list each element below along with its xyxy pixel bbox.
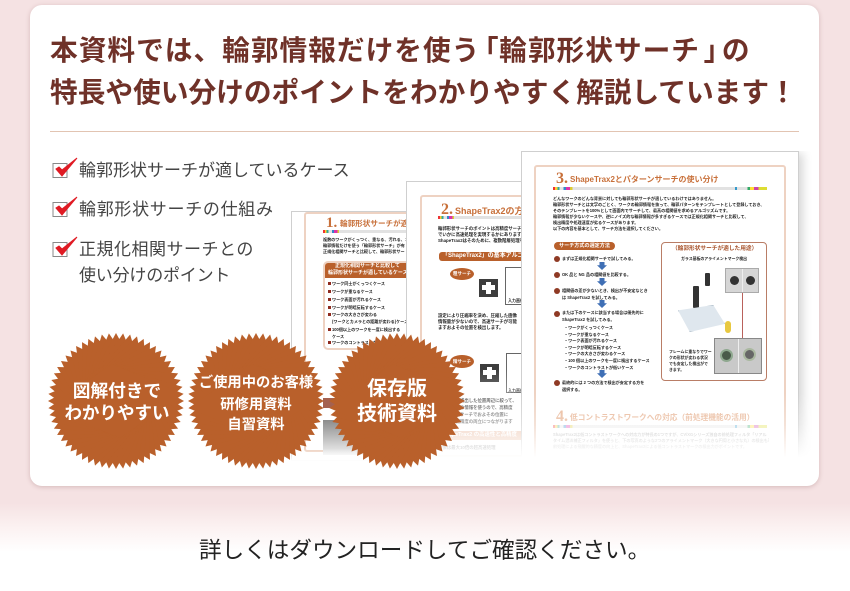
camera icon large	[693, 286, 699, 308]
page 1 case box: ワークが重なるケース	[332, 289, 373, 294]
search method steps: まずは正規化相関サーチで試してみる。	[562, 256, 636, 261]
checklist	[52, 158, 350, 285]
page 1 case box: (ワークとカメラとの距離が変わる)ケース	[332, 319, 407, 324]
section 4 heading: 4.	[556, 408, 568, 425]
cross template	[479, 279, 498, 297]
search method steps: ・ワークが明暗反転するケース	[564, 345, 621, 350]
page 1 content: 輪郭情報だけを使う「輪郭形状サーチ」が有	[323, 243, 405, 248]
badge text: training material	[199, 374, 313, 433]
page 3 heading	[556, 170, 719, 187]
badge text: easy to understand: 図解付きで	[73, 381, 161, 401]
yellow cable	[725, 321, 731, 333]
search method steps: 相関値の差が少ないとき、検出が不安定なとき	[562, 288, 648, 293]
page 2 heading: 2.	[441, 201, 453, 218]
page 1 case box: ケース	[332, 334, 344, 339]
page 2 fade	[406, 369, 522, 459]
box caption	[669, 349, 712, 372]
input image box 2	[506, 353, 556, 393]
footer message: 詳しくはダウンロードしてご確認ください。	[199, 538, 650, 563]
box caption: クの形状が変わる状況	[669, 355, 708, 360]
page 2 content	[438, 201, 522, 450]
page 1 lower figure	[323, 398, 407, 408]
badge text: training material: 研修用資料	[220, 397, 292, 413]
search method pill: サーチ方式の選定方法	[559, 243, 610, 249]
page 1 case box: 100個以上のワークを一度に検出する	[332, 327, 400, 332]
check item 3	[52, 236, 254, 285]
search method steps: ShapeTrax2 を試してみる。	[562, 317, 615, 322]
section 4 text	[553, 432, 769, 449]
mark photo upper	[725, 268, 759, 293]
page 2 lower heading	[439, 431, 559, 440]
title: 本資料では、輪郭情報だけを使う「輪郭形状サーチ」の	[50, 35, 751, 66]
search method steps: は ShapeTrax2 を試してみる。	[562, 295, 620, 300]
panel: document page 2	[406, 181, 522, 459]
page 2 content: 画像は最大10倍の超高速処理	[438, 445, 496, 450]
badge text: easy to understand	[64, 381, 170, 423]
application box	[661, 242, 767, 381]
page 2 content: 少ない階層の情報を使うので、高精度	[438, 405, 512, 410]
page 1 case box: ワーク表面が汚れるケース	[332, 297, 381, 302]
coarse search label: 粗サーチ	[453, 271, 471, 276]
mark photo lower	[714, 338, 762, 374]
badge text: archive technical material	[357, 378, 437, 425]
page 3 heading: ShapeTrax2とパターンサーチの使い分け	[570, 175, 719, 184]
connector arrow	[742, 293, 743, 338]
fine search label	[450, 355, 474, 368]
application box: ガラス基板のアライメントマーク検出	[681, 256, 747, 261]
badge text: training material: ご使用中のお客様	[199, 375, 313, 391]
check item 2: 輪郭形状サーチの仕組み	[79, 200, 274, 219]
search method steps: または下のケースに該当する場合は優先的に	[562, 310, 644, 315]
page 3 intro text: 検出精度や処理速度が劣るケースがあります。	[553, 220, 638, 225]
page 2 content: ShapeTrax2の方	[455, 206, 522, 216]
panel: document page 3	[521, 151, 819, 463]
search method steps: ・ワークが重なるケース	[564, 332, 609, 337]
page 2 algorithm heading	[439, 252, 559, 261]
divider	[50, 131, 799, 132]
search method steps: ・ワーク表面が汚れるケース	[564, 338, 617, 343]
page 3 intro text: どんなワークのどんな背景に対しても輪郭形状サーチが適しているわけではありません。	[553, 196, 716, 201]
page 1 case box: ワークの大きさが変わる	[332, 312, 377, 317]
page 2 content: 設定により圧縮率を決め、圧縮した画像	[438, 313, 517, 318]
search method steps: ・ワークの大きさが変わるケース	[564, 351, 625, 356]
title: 特長や使い分けのポイントをわかりやすく解説しています！	[50, 77, 797, 108]
box caption: フレームに重なりでワー	[669, 349, 712, 354]
badge text: archive technical material: 保存版	[367, 378, 427, 400]
page 1 case box: ワークのコントラストが低い	[332, 340, 385, 345]
page 3 intro text: 輪郭情報が少ないケースや、逆にノイズ的な輪郭情報が多すぎるケースでは正規化相関サーチと比較して、	[553, 214, 749, 219]
page 3 intro text: 輪郭形状サーチとは文字のごとく、ワークの輪郭情報を抜って、輪郭パターンをテンプレートとして登録しておき、	[553, 202, 764, 207]
page 1 content	[323, 215, 407, 350]
page 2 content: 情報量が少ないので、高速サーチが可能	[438, 319, 517, 324]
search method steps: 最終的には 2 つの方法で検出が安定する方を	[562, 380, 644, 385]
page 1 case box	[323, 261, 443, 350]
page 1 fade	[291, 449, 407, 461]
check item 3: 使い分けのポイント	[79, 266, 230, 285]
check item 3: 正規化相関サーチとの	[79, 240, 254, 259]
page 2 content: 粗サーチで検出した位置周辺に絞って、	[438, 398, 517, 403]
panel: main card	[30, 5, 819, 486]
application box: （輪郭形状サーチが適した用途）	[672, 246, 757, 252]
check item 1: 輪郭形状サーチが適しているケース	[79, 161, 350, 180]
page 1 case box: 正規化相関サーチと比較して	[335, 263, 400, 269]
search method pill	[554, 242, 615, 250]
page 1 heading: 輪郭形状サーチが適	[340, 219, 407, 228]
page 1 content: 1.	[326, 215, 337, 231]
page 3 intro text: そのテンプレートを100%として画面内でサーチして、最高の相関値を求めるアルゴリズムです。	[553, 208, 730, 213]
page 3 intro text	[553, 196, 764, 231]
search method steps: ・ワークがくっつくケース	[564, 325, 613, 330]
page 1 case box: ワーク同士がくっつくケース	[332, 281, 385, 286]
badge text: training material: 自習資料	[227, 417, 285, 433]
search method steps: 選択する。	[562, 387, 582, 392]
page 3 intro text: 以下の内容を基本として、サーチ方法を選択してください。	[553, 226, 663, 231]
page 1 case box: ワークが明暗反転するケース	[332, 305, 385, 310]
cross template 2	[480, 364, 499, 382]
page 3 fade	[521, 393, 819, 463]
input image box	[505, 267, 555, 305]
search method steps	[554, 256, 650, 392]
search method steps: OK 品と NG 品の相関値を比較する。	[562, 272, 631, 277]
page 1 case box: 輪郭形状サーチが適しているケース	[328, 270, 407, 276]
page 2 lower heading: ShapeTrax2 の高速性と高精度	[442, 432, 517, 438]
coarse search label	[450, 268, 474, 280]
page 1 content: 正規化相関サーチと比較して、輪郭形状サー	[323, 249, 405, 254]
badge text: archive technical material: 技術資料	[357, 403, 437, 425]
box caption: きます。	[669, 367, 684, 372]
section 4 text: 前処理による飛躍的な精度の向上と、ShapeTrax2による低コントラストマークの検出力がポイントです。	[553, 444, 747, 449]
page 2 content: さらに、粗サーチでおよその位置に	[438, 412, 508, 417]
section 4 text: ShapeTrax2は低コントラストワークへの対応力が特長の1つですが、CV/XGシリーズ独自の前処理フィルタ「リアル	[553, 432, 767, 437]
camera icon small	[705, 273, 710, 286]
page 1 content: 複数のワークがくっつく、重なる、汚れる、コ	[323, 237, 407, 242]
glass plate	[678, 305, 725, 332]
page 3 heading: 3.	[556, 170, 568, 187]
panel: document page 1	[291, 211, 407, 461]
title	[50, 35, 797, 108]
page 2 content: ShapeTrax2はそのために、複数階層処理を	[438, 238, 522, 243]
search method steps: ・100 個以上のワークを一度に検出するケース	[564, 358, 650, 363]
fine search label: 精サーチ	[453, 359, 471, 364]
page 2 content: 高速性と高精度の両立につながります	[438, 419, 513, 424]
search method steps: ・ワークのコントラストが低いケース	[564, 365, 633, 370]
page 2 content: ますおよその位置を検出します。	[438, 325, 503, 330]
page 3 content	[553, 170, 769, 449]
section 4 heading	[556, 408, 754, 425]
badge text: easy to understand: わかりやすい	[64, 403, 170, 423]
box caption: でも安定した検出がで	[669, 361, 708, 366]
section 4 heading: 低コントラストワークへの対応（前処理機能の活用）	[570, 413, 754, 422]
